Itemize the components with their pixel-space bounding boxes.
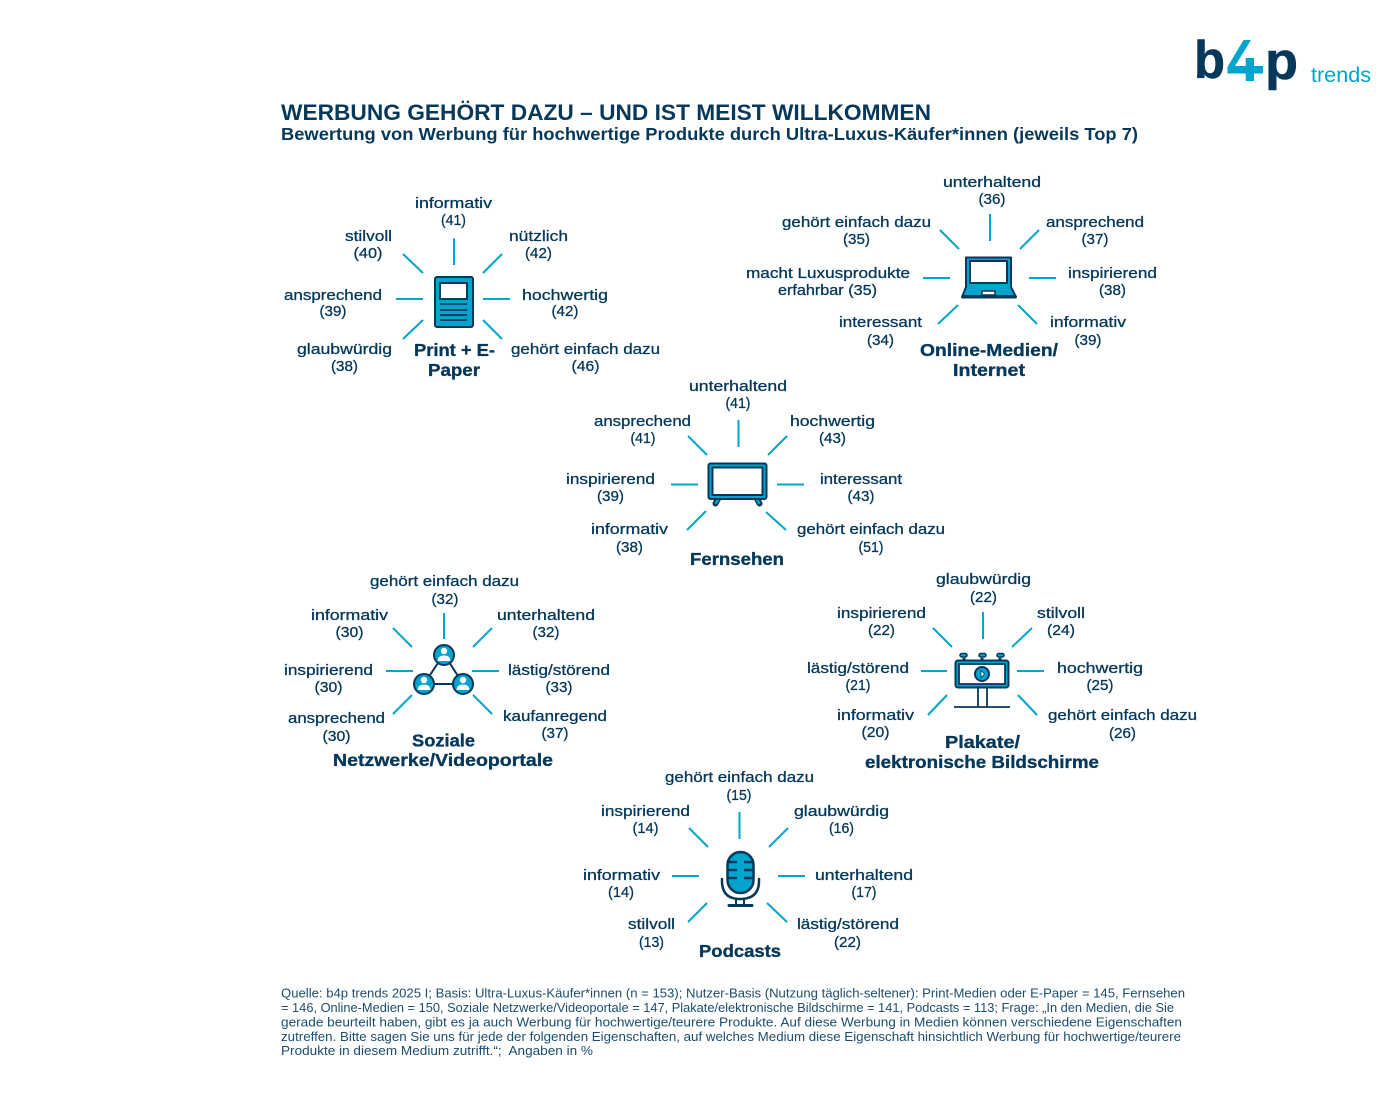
label: gehört einfach dazu 26 [1048, 707, 1197, 742]
label: inspirierend 30: inspirierend [284, 662, 373, 679]
icon: television [708, 464, 766, 504]
label: informativ 14 [583, 867, 661, 901]
logo: b4p trends [1194, 31, 1371, 91]
label: glaubwürdig 38 [297, 341, 392, 375]
subtitle: Bewertung von Werbung für hochwertige Produkte durch Ultra-Luxus-Käufer*innen (jeweils Top 7) [281, 124, 1138, 144]
label: unterhaltend 41 [689, 378, 787, 412]
label: lästig/störend 22: (22) [834, 934, 861, 951]
label: unterhaltend 32: unterhaltend [497, 607, 595, 624]
label: informativ 30: (30) [336, 624, 364, 641]
rays: billboard [921, 612, 1044, 715]
label: informativ 14: informativ [583, 867, 661, 884]
label: lästig/störend 33: lästig/störend [508, 662, 610, 679]
rays: print [396, 238, 510, 339]
label: informativ 30: informativ [311, 607, 389, 624]
label: informativ 41: (41) [441, 212, 466, 229]
label: unterhaltend 17 [815, 867, 913, 901]
icon: laptop [962, 258, 1016, 298]
label: inspirierend 22: (22) [868, 622, 895, 639]
label: hochwertig 42 [522, 287, 608, 320]
panel: Print + E-Paper [284, 195, 660, 380]
label: stilvoll 24 [1037, 605, 1085, 639]
label: gehört einfach dazu 35: gehört einfach dazu [782, 214, 931, 231]
label: unterhaltend 41: unterhaltend [689, 378, 787, 395]
label: stilvoll 40: stilvoll [345, 228, 392, 245]
label: gehört einfach dazu 46: (46) [572, 358, 600, 375]
heading: Print + E-Paper [414, 340, 495, 380]
label: macht Luxusprodukte erfahrbar 35: macht Luxusprodukte [746, 265, 910, 282]
label: interessant 34: (34) [867, 332, 894, 349]
label: gehört einfach dazu 32: (32) [432, 591, 458, 608]
panel: Fernsehen [566, 378, 945, 569]
heading: Soziale Netzwerke/Videoportale: Soziale [412, 730, 475, 750]
label: inspirierend 22 [837, 605, 926, 639]
label: kaufanregend 37 [503, 708, 607, 742]
label: gehört einfach dazu 46 [511, 341, 660, 375]
label: gehört einfach dazu 51: gehört einfach dazu [797, 521, 945, 538]
label: informativ 41: informativ [415, 195, 493, 212]
label: inspirierend 38 [1068, 265, 1157, 299]
logo: b4p trends: b [1194, 31, 1225, 90]
label: unterhaltend 17: unterhaltend [815, 867, 913, 884]
label: kaufanregend 37: kaufanregend [503, 708, 607, 725]
label: stilvoll 24: stilvoll [1037, 605, 1085, 622]
label: inspirierend 14: (14) [632, 820, 658, 837]
label: stilvoll 13 [628, 916, 675, 951]
icon: billboard [954, 654, 1010, 707]
label: inspirierend 39: inspirierend [566, 471, 655, 488]
label: informativ 39: informativ [1050, 314, 1127, 331]
label: informativ 38: (38) [616, 539, 643, 556]
label: glaubwürdig 22: (22) [970, 589, 997, 606]
label: informativ 41 [415, 195, 493, 229]
label: inspirierend 39 [566, 471, 655, 505]
heading: Podcasts: Podcasts [699, 941, 781, 961]
label: interessant 34: interessant [839, 314, 923, 331]
label: inspirierend 38: (38) [1099, 282, 1126, 299]
heading: Soziale Netzwerke/Videoportale: Netzwerke/Videoportale [333, 750, 553, 770]
label: interessant 43: (43) [848, 488, 874, 505]
label: lästig/störend 22 [797, 916, 899, 951]
title: WERBUNG GEHÖRT DAZU – UND IST MEIST WILLKOMMEN [281, 100, 931, 125]
icon: microphone [722, 852, 759, 906]
icon: newspaper [435, 277, 473, 327]
label: hochwertig 43: (43) [819, 430, 846, 447]
label: informativ 39 [1050, 314, 1127, 349]
label: ansprechend 37: (37) [1082, 231, 1108, 248]
label: ansprechend 37 [1046, 214, 1144, 248]
label: stilvoll 13: stilvoll [628, 916, 675, 933]
rays: tv [671, 420, 804, 530]
label: inspirierend 14 [601, 803, 690, 837]
logo: b4p trends: trends [1311, 64, 1371, 87]
label: gehört einfach dazu 26: gehört einfach dazu [1048, 707, 1197, 724]
label: gehört einfach dazu 15 [665, 769, 814, 804]
label: glaubwürdig 38: (38) [331, 358, 358, 375]
label: hochwertig 43: hochwertig [790, 413, 875, 430]
footnote: source [281, 986, 1185, 1058]
label: glaubwürdig 16: glaubwürdig [794, 803, 889, 820]
label: gehört einfach dazu 51 [797, 521, 945, 556]
rays: online [923, 214, 1056, 324]
heading: Online-Medien/Internet: Online-Medien/ [920, 340, 1058, 360]
label: ansprechend 41: ansprechend [594, 413, 691, 430]
heading: Print + E-Paper: Print + E- [414, 340, 495, 360]
label: gehört einfach dazu 35: (35) [843, 231, 870, 248]
label: interessant 34 [839, 314, 923, 349]
label: informativ 20 [837, 707, 915, 741]
heading: Plakate/elektronische Bildschirme [865, 732, 1099, 772]
label: ansprechend 39: ansprechend [284, 287, 382, 304]
heading: Fernsehen: Fernsehen [690, 549, 784, 569]
label: gehört einfach dazu 32: gehört einfach dazu [370, 573, 519, 590]
heading: Plakate/elektronische Bildschirme: Plakate/ [945, 732, 1020, 752]
label: glaubwürdig 16 [794, 803, 889, 837]
label: stilvoll 24: (24) [1047, 622, 1075, 639]
label: ansprechend 30 [288, 710, 385, 745]
label: interessant 43: interessant [820, 471, 903, 488]
label: glaubwürdig 22 [936, 571, 1031, 606]
label: stilvoll 40 [345, 228, 392, 262]
label: informativ 38 [591, 521, 669, 556]
footnote: source: Quelle: b4p trends 2025 I; Basis: Ultra-Luxus-Käufer*innen (n = 153); Nutzer-Basis (Nutzung täglich-seltener): Print-Medien oder E-Paper = 145, Fernsehen [281, 986, 1185, 1000]
footnote: source: Produkte in diesem Medium zutrifft.“; Angaben in % [281, 1044, 593, 1058]
label: ansprechend 39: (39) [320, 303, 346, 320]
label: gehört einfach dazu 32 [370, 573, 519, 608]
heading: Plakate/elektronische Bildschirme: elektronische Bildschirme [865, 752, 1099, 772]
label: inspirierend 39: (39) [597, 488, 624, 505]
heading: Print + E-Paper: Paper [428, 360, 480, 380]
label: unterhaltend 36: (36) [978, 191, 1006, 208]
label: informativ 39: (39) [1074, 332, 1102, 349]
heading: Soziale Netzwerke/Videoportale [333, 730, 553, 770]
label: macht Luxusprodukte erfahrbar 35: erfahrbar (35) [778, 282, 877, 299]
heading: Online-Medien/Internet: Internet [953, 360, 1025, 380]
logo: b4p trends: p [1265, 32, 1298, 91]
label: kaufanregend 37: (37) [542, 725, 568, 742]
label: unterhaltend 41: (41) [726, 395, 750, 412]
label: informativ 30 [311, 607, 389, 641]
label: inspirierend 38: inspirierend [1068, 265, 1157, 282]
label: informativ 20: informativ [837, 707, 915, 724]
rays: podcasts [672, 812, 805, 922]
label: stilvoll 40: (40) [354, 245, 382, 262]
label: lästig/störend 21: (21) [846, 677, 870, 694]
label: unterhaltend 36 [943, 174, 1041, 208]
label: lästig/störend 22: lästig/störend [797, 916, 899, 933]
label: nützlich 42: (42) [525, 245, 552, 262]
label: unterhaltend 32: (32) [532, 624, 560, 641]
label: glaubwürdig 22: glaubwürdig [936, 571, 1031, 588]
label: hochwertig 42: (42) [552, 303, 578, 320]
label: unterhaltend 32 [497, 607, 595, 641]
label: stilvoll 13: (13) [639, 934, 664, 951]
label: hochwertig 42: hochwertig [522, 287, 608, 304]
label: hochwertig 25: (25) [1086, 677, 1114, 694]
label: inspirierend 22: inspirierend [837, 605, 926, 622]
label: gehört einfach dazu 35 [782, 214, 931, 248]
footnote: source: gerade beurteilt haben, gibt es ja auch Werbung für hochwertige/teurere Produkte. Auf diese Werbung in Medien können verschiedene Eigenschaften [281, 1016, 1182, 1030]
label: glaubwürdig 38: glaubwürdig [297, 341, 392, 358]
label: nützlich 42 [509, 228, 568, 262]
panel: Soziale Netzwerke/Videoportale [284, 573, 610, 770]
label: ansprechend 37: ansprechend [1046, 214, 1144, 231]
panel: Online-Medien/Internet [746, 174, 1157, 380]
label: ansprechend 41 [594, 413, 691, 447]
label: macht Luxusprodukte erfahrbar 35 [746, 265, 910, 299]
label: lästig/störend 33: (33) [546, 679, 572, 696]
label: informativ 38: informativ [591, 521, 669, 538]
footnote: source: = 146, Online-Medien = 150, Soziale Netzwerke/Videoportale = 147, Plakate/elektronische Bildschirme = 141, Podcasts = 113; Frage: „In den Medien, die Sie [281, 1001, 1174, 1015]
label: ansprechend 30: ansprechend [288, 710, 385, 727]
label: interessant 43 [820, 471, 903, 505]
label: lästig/störend 33 [508, 662, 610, 696]
label: ansprechend 30: (30) [322, 728, 350, 745]
label: hochwertig 25: hochwertig [1057, 660, 1143, 677]
heading: Online-Medien/Internet [920, 340, 1058, 380]
label: ansprechend 41: (41) [630, 430, 656, 447]
label: glaubwürdig 16: (16) [829, 820, 854, 837]
label: gehört einfach dazu 26: (26) [1109, 725, 1136, 742]
label: informativ 14: (14) [608, 884, 634, 901]
label: inspirierend 14: inspirierend [601, 803, 690, 820]
label: gehört einfach dazu 15: gehört einfach dazu [665, 769, 814, 786]
label: ansprechend 39 [284, 287, 382, 320]
panel: Plakate/elektronische Bildschirme [807, 571, 1197, 772]
label: gehört einfach dazu 51: (51) [858, 539, 884, 556]
footnote: source: zutreffen. Bitte sagen Sie uns für jede der folgenden Eigenschaften, auf welches Medium diese Eigenschaft hinsichtlich Werbung für hochwertige/teurere [281, 1030, 1181, 1044]
panel: Podcasts [583, 769, 913, 961]
label: lästig/störend 21: lästig/störend [807, 660, 909, 677]
label: gehört einfach dazu 46: gehört einfach dazu [511, 341, 660, 358]
label: inspirierend 30 [284, 662, 373, 696]
label: nützlich 42: nützlich [509, 228, 568, 245]
label: inspirierend 30: (30) [314, 679, 342, 696]
label: unterhaltend 17: (17) [852, 884, 876, 901]
label: informativ 20: (20) [862, 724, 890, 741]
rays: social [386, 613, 499, 714]
label: lästig/störend 21 [807, 660, 909, 694]
label: hochwertig 43 [790, 413, 875, 447]
label: hochwertig 25 [1057, 660, 1143, 694]
icon: network [414, 645, 473, 694]
label: gehört einfach dazu 15: (15) [726, 787, 752, 804]
label: unterhaltend 36: unterhaltend [943, 174, 1041, 191]
